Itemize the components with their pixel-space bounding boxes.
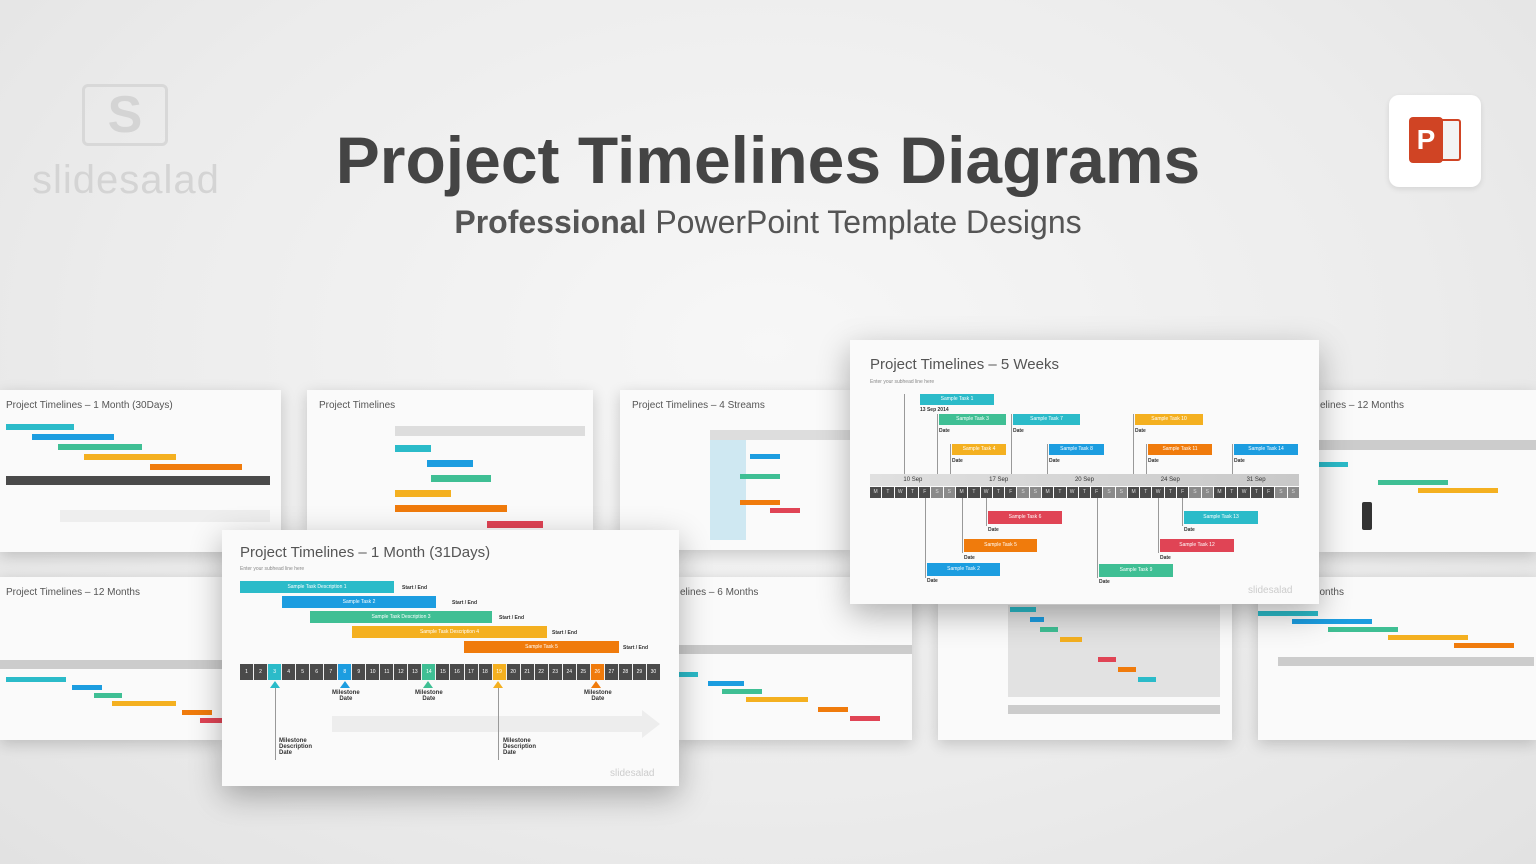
slide: project timelines phases: Project Timelines [319,400,395,411]
day letters row: T [972,489,975,495]
milestones [275,688,276,760]
day letters row: M [1217,489,1222,495]
slide: 12 months right bottom [1258,577,1536,740]
day letters row: T [1144,489,1147,495]
slide: 1 month 31 days (front): Sample Task 5 [525,644,558,650]
slide: 5 weeks (front): Date [1135,428,1146,434]
slide: 1 month 31 days (front): Sample Task Description 3 [371,614,431,620]
slide: 6 months [678,577,912,740]
day row: 18 [482,669,488,675]
day row: 3 [273,669,276,675]
slide: 1 month 31 days (front): Start / End [452,600,477,606]
day row: 5 [301,669,304,675]
day row: 23 [552,669,558,675]
slide: 6 months: elines – 6 Months [680,587,758,598]
day row: 8 [343,669,346,675]
slide: 5 weeks (front): Date [939,428,950,434]
week header: 24 Sep [1161,477,1180,483]
logo: slidesalad: S [108,86,142,144]
slide: 5 weeks (front): Date [964,555,975,561]
slide: 5 weeks (front): Date [1148,458,1159,464]
slide: 1 month 31 days (front): Date [279,750,292,756]
week header [870,474,1299,486]
day row: 19 [496,669,502,675]
slide: 1 month 31 days (front): Description [503,744,536,750]
slide: 1 month 31 days (front): Date [503,750,516,756]
slide: gantt months [938,595,1232,740]
task bars [240,581,394,593]
slide: 5 weeks (front): Date [1049,458,1060,464]
day letters row: W [984,489,989,495]
day letters row [870,487,1299,498]
day letters row: M [1131,489,1136,495]
day row: 11 [384,669,389,675]
heading: Project Timelines – 1 Month (31Days) [240,544,490,561]
slide: 5 weeks (front): Sample Task 6 [1009,514,1041,520]
slide: 1 month 31 days (front): Description [279,744,312,750]
day letters row: M [1045,489,1050,495]
day row: 2 [259,669,262,675]
day letters row: T [997,489,1000,495]
slide: 1 month 31 days (front): Start / End [402,585,427,591]
slide: 5 weeks (front): Sample Task 14 [1248,446,1284,452]
day letters row: W [898,489,903,495]
slide: 1 month 31 days (front): Milestone [415,690,443,696]
logo: slidesalad: slidesalad [32,158,220,202]
day row: 13 [412,669,418,675]
tasks above [904,394,905,474]
slide: 5 weeks (front): Sample Task 1 [941,396,973,402]
slide: 5 weeks (front): Date [1099,579,1110,585]
slide: 5 weeks (front): Date [952,458,963,464]
icon: powerpoint: P [1417,124,1435,155]
slide: 1 month 31 days (front) [222,530,679,786]
day row: 24 [566,669,572,675]
day letters row: S [1206,489,1209,495]
slide: 1 month 31 days (front): Start / End [623,645,648,651]
day letters row: T [1230,489,1233,495]
day letters row: T [1083,489,1086,495]
slide: 1 month 31 days (front): Milestone [503,738,531,744]
slide: 4 streams [620,390,852,550]
day row: 14 [426,669,432,675]
slide: 5 weeks (front): Enter your subhead line here [870,379,934,385]
day letters row: S [948,489,951,495]
slide: 1 month 31 days (front): Sample Task 2 [343,599,375,605]
slide: 5 weeks (front): Sample Task 5 [984,542,1017,548]
slide: 5 weeks (front): 13 Sep 2014 [920,407,949,413]
day row: 4 [287,669,290,675]
day row: 6 [315,669,318,675]
slide: 5 weeks (front): Sample Task 11 [1162,446,1198,452]
day row: 10 [370,669,376,675]
slide: 5 weeks (front): slidesalad [1248,585,1292,596]
slide: 5 weeks (front): Sample Task 3 [956,416,989,422]
slide: 5 weeks (front): Sample Task 13 [1203,514,1239,520]
task bars: Sample Task Description 1 [287,584,347,590]
slide: 12 months right bottom: elines – 12 Months [1260,587,1344,598]
day letters row: F [1181,489,1184,495]
slide: 5 weeks (front): Date [988,527,999,533]
arrow [332,716,642,732]
day letters row: T [1058,489,1061,495]
day letters row: F [1267,489,1270,495]
slide: 12 months right: elines – 12 Months [1320,400,1404,411]
logo: slidesalad [32,84,220,202]
milestone markers [270,681,601,688]
slide: 1 month 30 days [0,390,281,552]
day letters row: F [1009,489,1012,495]
slide: 5 weeks (front): Sample Task 2 [947,566,980,572]
slide: 1 month 31 days (front): Date [339,696,352,702]
day letters row: S [1021,489,1025,495]
day row: 26 [595,669,600,675]
slide: 5 weeks (front): Sample Task 9 [1120,567,1152,573]
day row: 20 [510,669,516,675]
day letters row: S [1107,489,1111,495]
day letters row: M [874,489,878,495]
slide: 12 months right [1318,390,1536,552]
slide: 5 weeks (front): Date [927,578,938,584]
icon: powerpoint [1389,95,1481,187]
slide: 12 months left [0,577,222,740]
slide: 5 weeks (front): Date [1013,428,1024,434]
week header: 10 Sep [903,477,922,483]
day row: 16 [454,669,460,675]
slide: project timelines phases [307,390,593,530]
slide: 5 weeks (front): Sample Task 8 [1060,446,1093,452]
slide: 1 month 30 days: Project Timelines – 1 Month (30Days) [6,400,173,411]
day row: 27 [609,669,614,675]
slide: 5 weeks (front): Sample Task 4 [963,446,995,452]
day letters row: S [1120,489,1123,495]
tasks below [986,498,987,526]
day row: 15 [440,669,446,675]
day row: 1 [245,669,248,675]
slide: 1 month 31 days (front): Date [591,696,604,702]
slide: 4 streams: Project Timelines – 4 Streams [632,400,765,411]
slide: 1 month 31 days (front): Start / End [499,615,524,621]
day letters row: W [1156,489,1160,495]
heading: Project Timelines – 5 Weeks [870,356,1059,373]
day row: 21 [524,669,530,675]
slide: 12 months left: Project Timelines – 12 Months [6,587,140,598]
day row: 9 [357,669,360,675]
day letters row: F [923,489,926,495]
slide: 5 weeks (front): Sample Task 7 [1030,416,1063,422]
slide: 1 month 31 days (front): Milestone [279,738,307,744]
slide: 5 weeks (front) [850,340,1319,604]
day letters row: S [1034,489,1037,495]
day row: 25 [580,669,586,675]
slide: 5 weeks (front): Sample Task 12 [1179,542,1215,548]
day row: 22 [538,669,544,675]
day letters row: T [886,489,889,495]
week header: 20 Sep [1075,477,1094,483]
slide: 5 weeks (front): Sample Task 10 [1151,416,1187,422]
slide: 1 month 31 days (front): Sample Task Description 4 [420,629,479,635]
day letters row: T [1169,489,1172,495]
day row [240,664,660,680]
day letters row: S [935,489,939,495]
title: Project Timelines Diagrams [336,123,1200,197]
slide: 1 month 31 days (front): Start / End [552,630,577,636]
subtitle: Professional PowerPoint Template Designs [454,204,1082,240]
day row: 28 [623,669,628,675]
day row: 7 [329,669,332,675]
week header: 31 Sep [1247,477,1266,483]
slide: 1 month 31 days (front): Milestone [332,690,360,696]
week header: 17 Sep [989,477,1008,483]
day letters row: T [911,489,914,495]
slide: 1 month 31 days (front): slidesalad [610,768,654,779]
slide: 1 month 31 days (front): Milestone [584,690,612,696]
day row: 29 [637,669,642,675]
day row: 30 [651,669,656,675]
slide: 5 weeks (front): Date [1160,555,1171,561]
day letters row: W [1070,489,1074,495]
day letters row: F [1095,489,1098,495]
day row: 12 [398,669,404,675]
slide: 5 weeks (front): Date [1234,458,1245,464]
slide: 1 month 31 days (front): Date [422,696,435,702]
slide: 1 month 31 days (front): Enter your subhead line here [240,566,304,572]
day letters row: S [1193,489,1197,495]
day letters row: W [1242,489,1246,495]
slide: 5 weeks (front): Date [1184,527,1195,533]
day row: 17 [468,669,474,675]
day letters row: M [960,489,964,495]
day letters row: S [1292,489,1295,495]
day letters row: T [1255,489,1258,495]
day letters row: S [1279,489,1283,495]
